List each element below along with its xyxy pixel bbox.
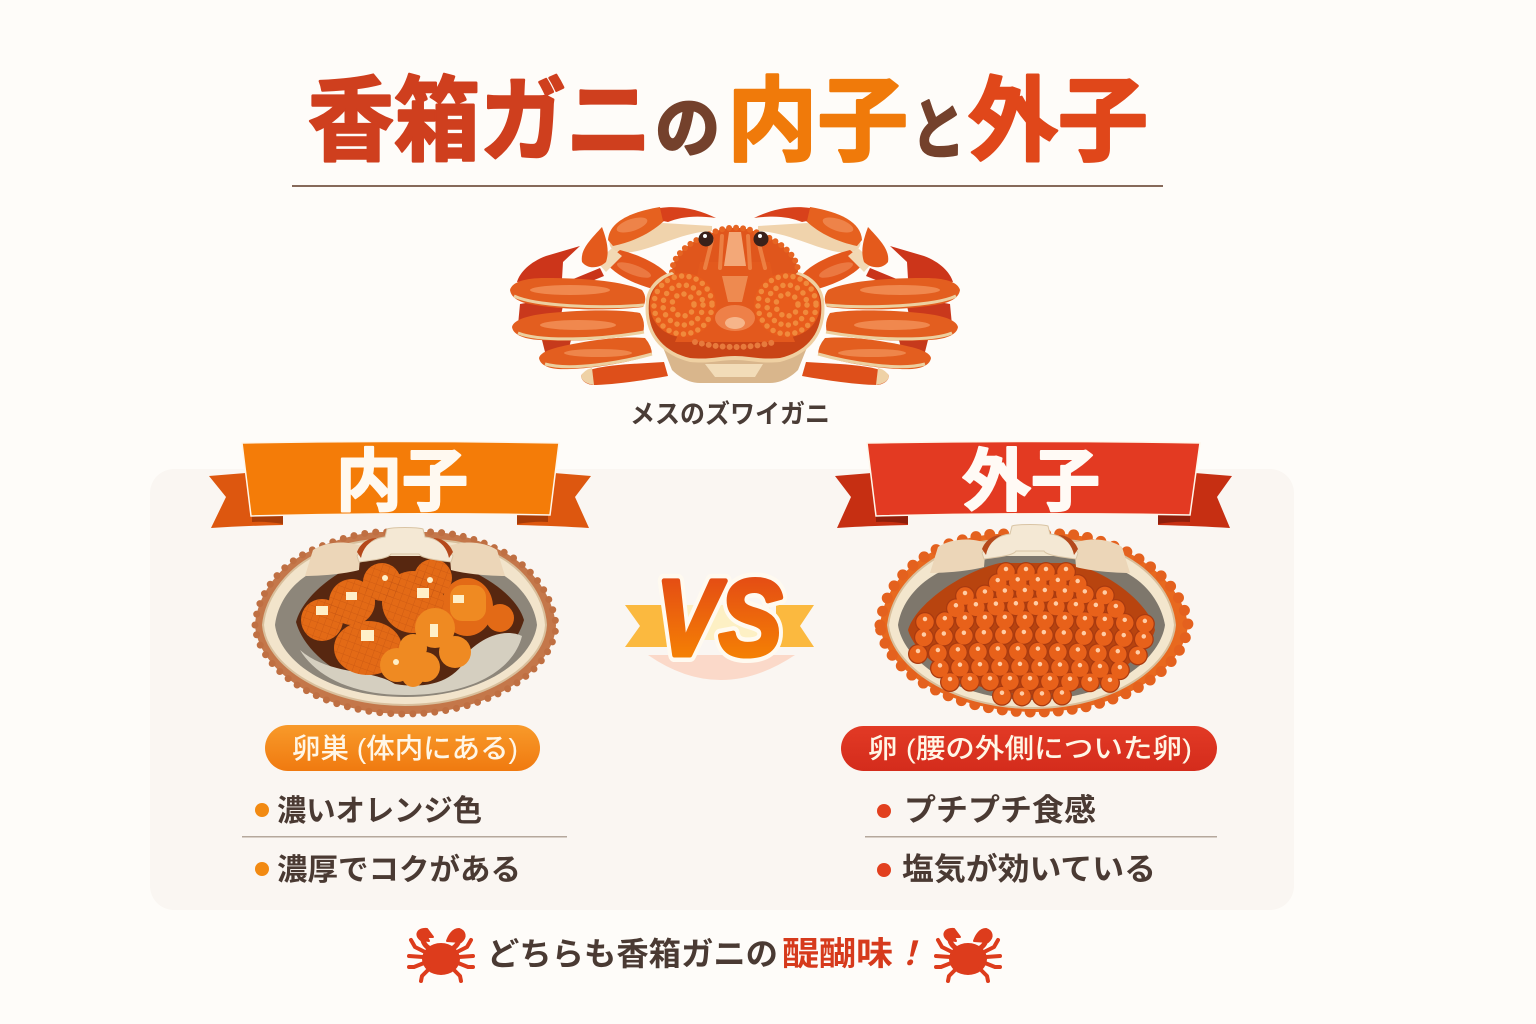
list: 外子 characteristics: プチプチ食感 [904, 793, 1096, 828]
label pill: 内子 [265, 725, 540, 771]
list: 外子 characteristics [865, 793, 1217, 887]
title: 香箱ガニ [308, 71, 652, 173]
footer message: ！ [893, 935, 926, 972]
title: と [911, 93, 965, 167]
list: 内子 characteristics: 濃いオレンジ色 [277, 795, 482, 828]
comparison panel [150, 469, 1294, 910]
title [308, 71, 1148, 173]
label pill: 外子 [841, 726, 1217, 771]
footer message [487, 935, 926, 972]
footer message: どちらも香箱ガニの [487, 936, 778, 972]
title: 外子 [968, 71, 1148, 173]
title: 内子 [727, 71, 908, 173]
illustration: shell with sotoko eggs [880, 524, 1188, 712]
footer message: 醍醐味 [782, 935, 893, 972]
crab caption: メスのズワイガニ [630, 399, 830, 429]
VS badge: VS [656, 557, 782, 678]
title: の [655, 91, 720, 165]
banner: 内子: 内子 [336, 444, 468, 520]
illustration: female snow crab [510, 207, 960, 385]
VS badge: VS [656, 557, 782, 678]
banner: 内子 [209, 442, 591, 528]
list: 内子 characteristics: 濃厚でコクがある [277, 853, 521, 887]
label pill: 内子: 卵巣 (体内にある) [292, 733, 518, 764]
list: 内子 characteristics [242, 795, 567, 887]
banner: 外子: 外子 [962, 444, 1100, 520]
icon: small crab right [936, 929, 1000, 981]
title underline [292, 185, 1163, 187]
illustration: shell with naiko roe [255, 528, 556, 714]
list: 外子 characteristics: 塩気が効いている [902, 852, 1156, 887]
label pill: 外子: 卵 (腰の外側についた卵) [868, 734, 1192, 764]
icon: small crab left [409, 929, 473, 981]
banner: 外子 [835, 442, 1232, 528]
